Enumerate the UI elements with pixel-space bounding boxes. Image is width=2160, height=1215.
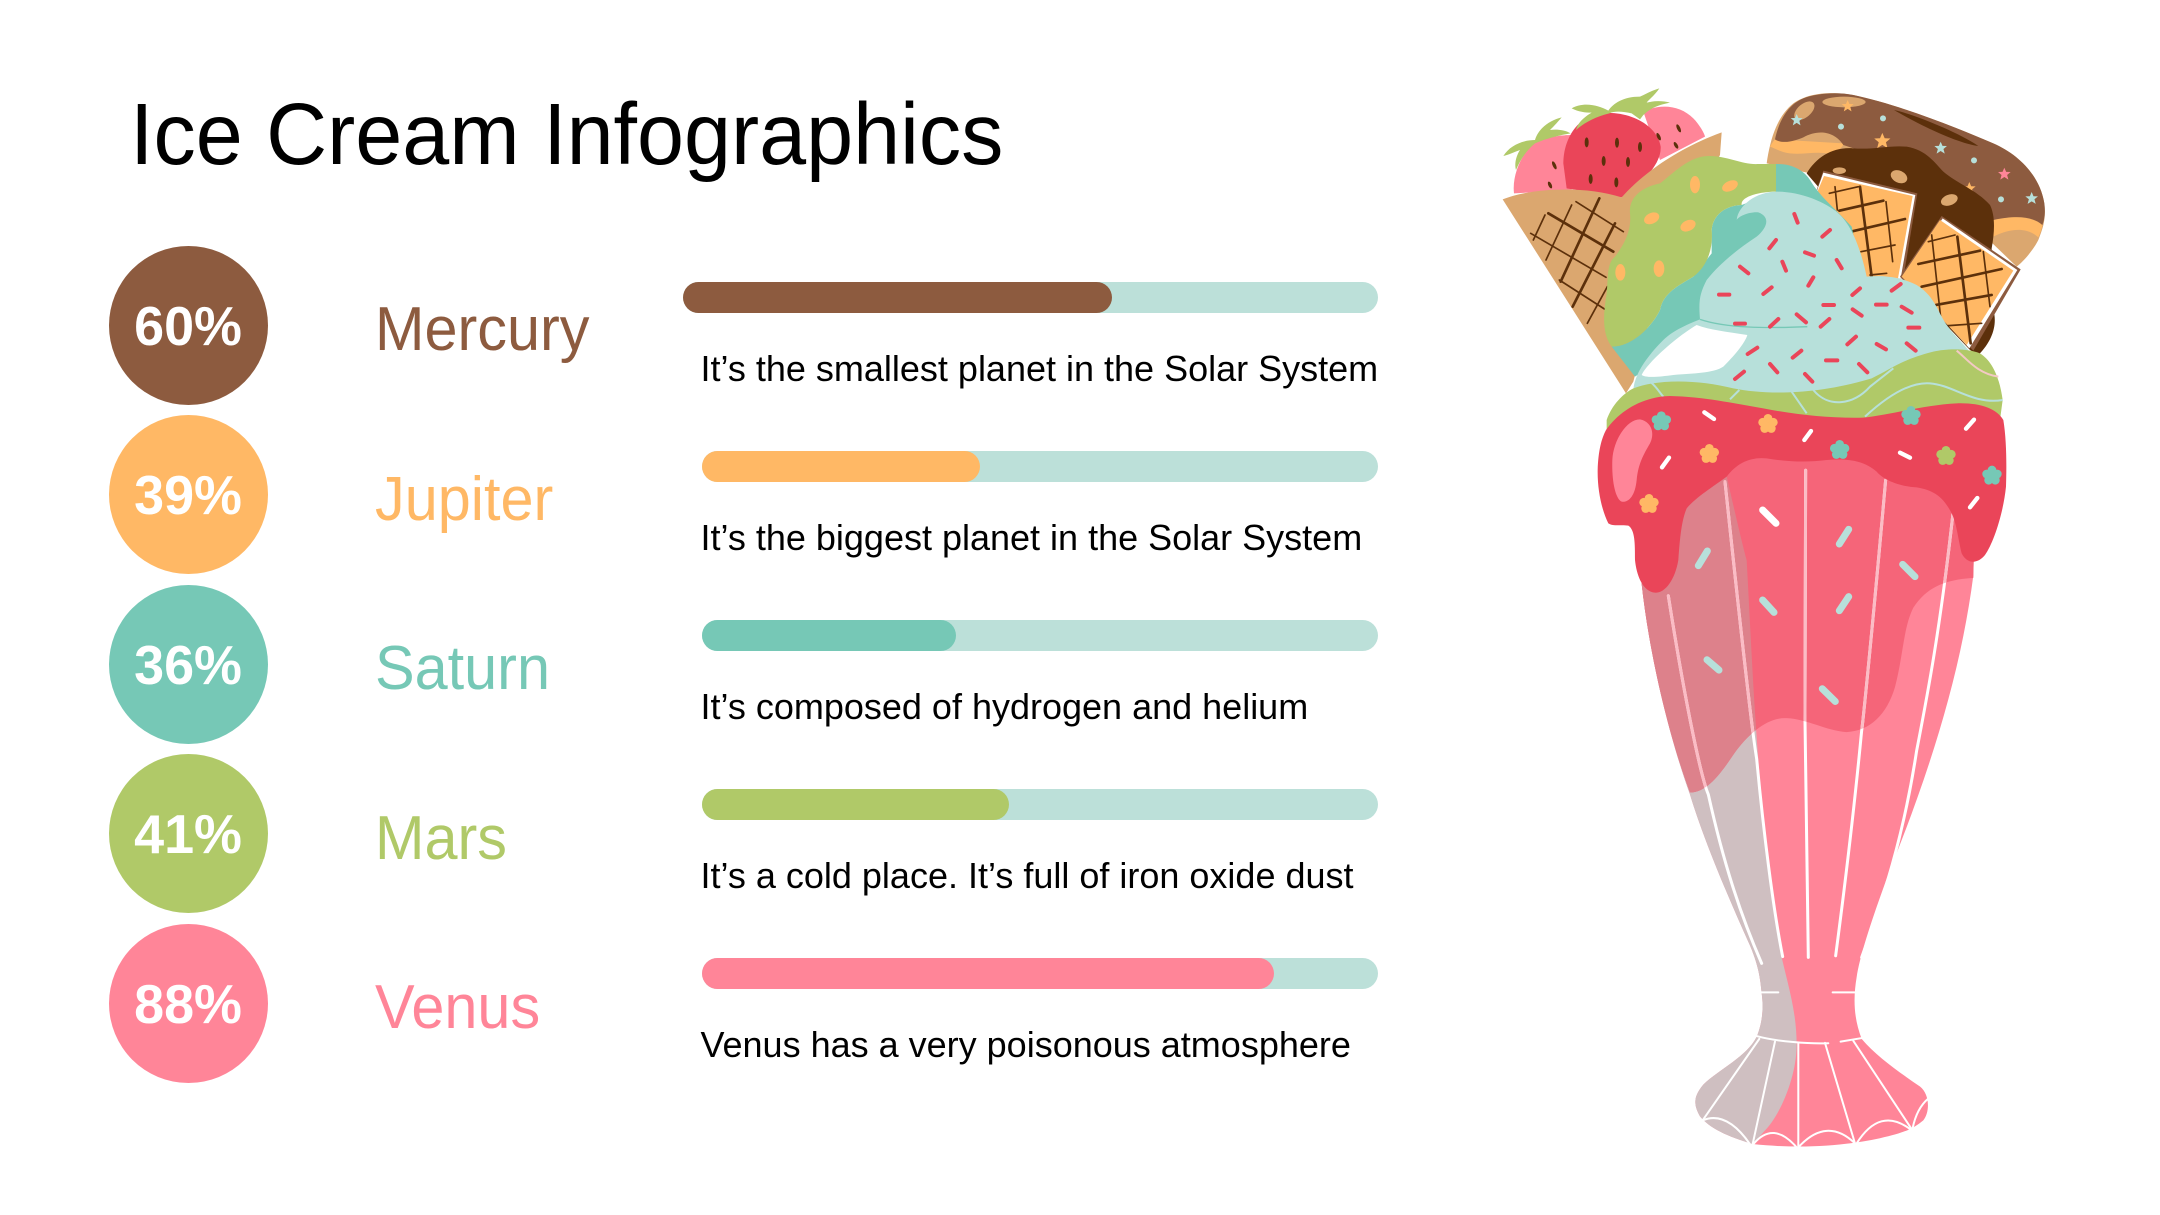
description: Saturn: It’s composed of hydrogen and helium <box>700 686 1308 727</box>
percentage badge: Jupiter 39% <box>109 415 268 574</box>
description: Mercury: It’s the smallest planet in the Solar System <box>700 348 1378 389</box>
wafer biscuit one <box>1817 171 1917 278</box>
description: Venus: Venus has a very poisonous atmosphere <box>700 1024 1351 1065</box>
percentage badge: Saturn 36%: 36% <box>134 634 242 696</box>
mint ice cream with sprinkles <box>1633 192 1968 402</box>
percentage badge: Jupiter 39%: 39% <box>134 464 242 526</box>
description: Mars: It’s a cold place. It’s full of iron oxide dust <box>700 855 1354 896</box>
illustration: ice cream sundae <box>1503 88 2045 1147</box>
progress bar: Saturn <box>702 620 1378 651</box>
planet name: Jupiter: Jupiter <box>375 465 553 534</box>
sundae glass <box>1642 441 1977 1147</box>
percentage badge: Mars 41% <box>109 754 268 913</box>
glass ridges <box>1668 470 1953 963</box>
chocolate drip <box>1807 146 1995 355</box>
percentage badge: Mercury 60%: 60% <box>134 295 242 357</box>
row: Saturn <box>109 585 1378 744</box>
row: Venus <box>109 924 1378 1083</box>
row: Mercury <box>109 246 1378 405</box>
strawberry leaves <box>1503 88 1670 170</box>
description: Jupiter: It’s the biggest planet in the Solar System <box>700 517 1362 558</box>
planet name: Saturn: Saturn <box>375 634 550 703</box>
white sprinkles <box>1662 412 1977 507</box>
centre strawberry <box>1563 113 1661 197</box>
candy pieces on green ice cream <box>1615 176 1740 281</box>
progress bar: Jupiter <box>702 451 1378 482</box>
percentage badge: Saturn 36% <box>109 585 268 744</box>
planet name: Mars: Mars <box>375 804 507 873</box>
progress bar: Mars <box>702 789 1378 820</box>
syrup inside glass <box>1642 441 1977 792</box>
percentage badge: Mars 41%: 41% <box>134 803 242 865</box>
row: Jupiter <box>109 415 1378 574</box>
right strawberry <box>1643 107 1705 160</box>
flower sprinkles <box>1639 406 2002 513</box>
waffle cone <box>1503 132 1722 393</box>
planet name: Mercury: Mercury <box>375 295 589 364</box>
planet name: Venus: Venus <box>375 973 540 1042</box>
percentage badge: Venus 88% <box>109 924 268 1083</box>
title: Ice Cream Infographics <box>130 86 1003 183</box>
donut with chocolate icing <box>1767 93 2045 355</box>
wafer biscuit two <box>1900 216 2021 351</box>
red syrup topping <box>1598 396 2006 612</box>
left strawberry <box>1514 135 1572 193</box>
percentage badge: Mercury 60% <box>109 246 268 405</box>
lower mint sprinkles <box>1707 660 1835 701</box>
syrup highlight <box>1612 419 1652 502</box>
glass foot lines <box>1703 992 1928 1147</box>
row: Mars <box>109 754 1378 913</box>
grey glass highlight <box>1642 469 1797 1144</box>
red sprinkles <box>1719 214 1919 382</box>
glass sprinkles <box>1698 510 1915 612</box>
whipped cream highlight <box>1642 325 1747 377</box>
progress bar: Venus <box>702 958 1378 989</box>
teal ice cream <box>1612 164 1860 377</box>
donut toppings <box>1791 97 2038 204</box>
strawberry seeds <box>1547 124 1682 189</box>
progress bar: Mercury <box>683 282 1378 313</box>
percentage badge: Venus 88%: 88% <box>134 973 242 1035</box>
green ice cream <box>1604 156 1776 347</box>
green ice cream band <box>1607 349 2003 430</box>
strawberries <box>1503 88 1860 393</box>
